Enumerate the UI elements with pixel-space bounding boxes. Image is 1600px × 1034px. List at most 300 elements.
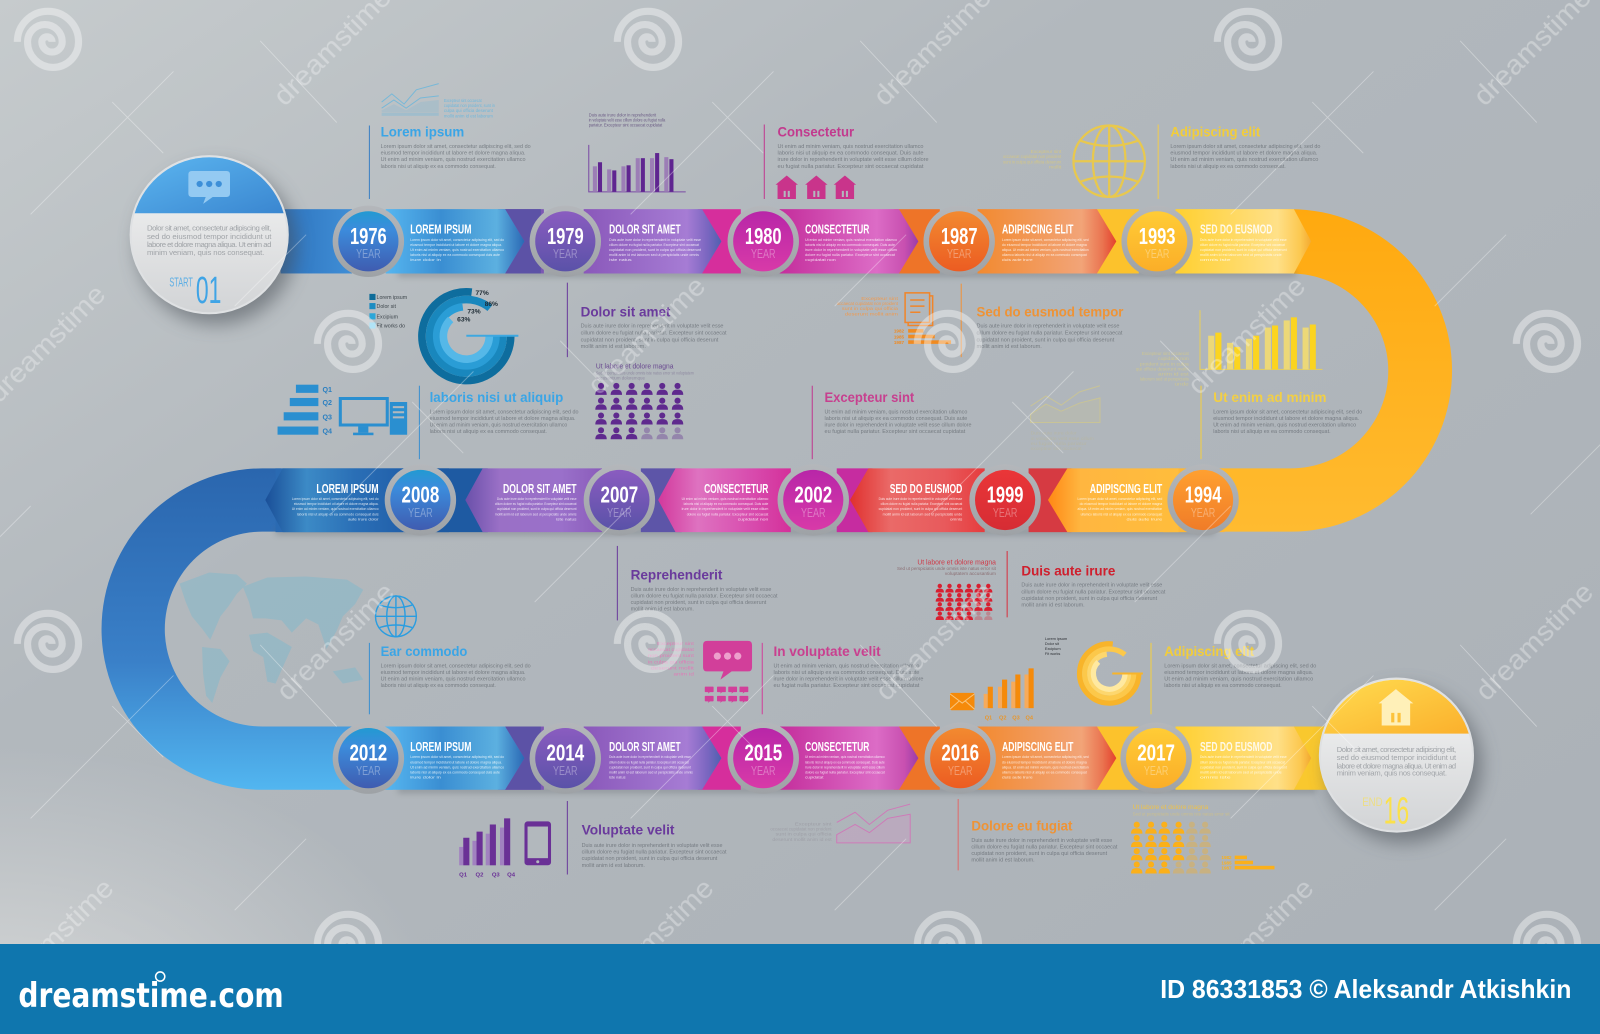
arrow: Dolor sit amet 2007: DOLOR SIT AMET xyxy=(503,481,577,496)
body text: cillum dolore eu fugiat nulla pariatur. Excepteur sint occaecat xyxy=(971,844,1118,850)
heading: Duis aute irure xyxy=(1021,564,1115,580)
watermark: dreamstime xyxy=(1469,576,1599,706)
small bubbles xyxy=(705,687,748,703)
caption note xyxy=(897,566,997,576)
body text: mollit anim id est laborum. xyxy=(977,344,1042,350)
body text: laboris nisi ut aliquip ex ea commodo consequat. xyxy=(1170,164,1286,170)
arrow: Dolor sit amet 2007: cillum dolore eu fugiat nulla pariatur. Excepteur sint occaecat xyxy=(495,501,577,506)
year badge 2012: 2012 xyxy=(349,740,387,766)
icons: houses xyxy=(776,176,856,199)
arrow: Lorem ipsum 1976: Lorem ipsum dolor sit amet, consectetur adipiscing elit, sed do xyxy=(410,237,505,242)
arrow: Sed do eusmod 1993: SED DO EUSMOD xyxy=(1200,222,1273,237)
year badge 2016: YEAR xyxy=(948,763,972,778)
start text: Dolor sit amet, consectetur adipiscing elit, xyxy=(147,224,271,233)
body text xyxy=(381,663,531,689)
bar labels: Q4 xyxy=(1026,715,1034,721)
year badge 1999: YEAR xyxy=(993,505,1017,520)
body text: laboris nisi ut aliquip ex ea commodo consequat. Duis aute xyxy=(773,670,919,676)
year badge 1993: 1993 xyxy=(1139,223,1176,249)
arrow: Sed do eusmod 2017 xyxy=(1176,727,1311,790)
arrow: Lorem ipsum 1976: laboris nisi ut aliquip ex ea commodo consequat duis aute xyxy=(410,252,501,257)
donut labels: 63% xyxy=(457,316,471,323)
legend: Fit works do xyxy=(377,324,405,330)
start number: 01 xyxy=(196,269,221,311)
heading: Ut enim ad minim xyxy=(1213,390,1327,406)
arrow: Consectetur 1980: cupidatat non xyxy=(805,257,836,262)
start text: labore et dolore magna aliqua. Ut enim ad xyxy=(147,240,271,249)
bar labels xyxy=(459,873,516,879)
arrow: Adipiscing elit 1994: ullamco laboris nisi ut aliquip ex ea commodo consequat xyxy=(1081,511,1163,516)
arrow: Dolor sit amet 2014: cillum dolore eu fugiat nulla pariatur. Excepteur sint occaecat xyxy=(609,759,689,764)
panel: Dolore eu fugiat xyxy=(958,799,1274,873)
arrow: Consectetur 2002 xyxy=(658,468,791,532)
body text xyxy=(631,587,778,613)
body text: cillum dolore eu fugiat nulla pariatur. Excepteur sint occaecat xyxy=(582,850,727,856)
arrow: Consectetur 2015: Ut enim ad minim veniam, quis nostrud exercitation ullamco xyxy=(805,754,885,759)
arrow: Lorem ipsum 2012 xyxy=(386,727,524,790)
body text: Duis aute irure dolor in reprehenderit in voluptate velit esse xyxy=(971,838,1112,844)
arrow: Consectetur 1980: CONSECTETUR xyxy=(805,222,870,237)
body text: mollit anim id est laborum. xyxy=(582,863,645,869)
year badge 2015 xyxy=(728,722,799,794)
Q1-Q4 stepped bars: Q3 xyxy=(322,413,332,421)
body text xyxy=(773,663,923,689)
arrow: Dolor sit amet 2007: iste natus xyxy=(556,516,577,521)
panel: Ut enim ad minim xyxy=(1136,310,1362,459)
year badge 2016 xyxy=(924,722,996,794)
chart note: in culpa qui officia xyxy=(648,659,694,664)
chart note: Excepteur sint xyxy=(861,296,899,301)
image credit: ID 86331853 © Aleksandr Atkishkin xyxy=(1160,976,1571,1004)
Q1-Q4 stepped bars: Q4 xyxy=(322,428,332,436)
arrow: Sed do eusmod 1993: cupidatat non proident, sunt in culpa qui officia deserunt xyxy=(1200,247,1288,252)
arrow: Adipiscing elit 2016: Lorem ipsum dolor sit amet, consectetur adipiscing elit, sed xyxy=(1002,754,1089,759)
body text: cillum dolore eu fugiat nulla pariatur. Excepteur sint occaecat xyxy=(631,593,778,599)
heading: Ear commodo xyxy=(381,644,468,660)
line chart xyxy=(382,84,439,114)
chart note: laborum sed ut perspiciatis xyxy=(1140,377,1189,382)
chart note: culpa qui officia deserunt xyxy=(444,108,494,113)
arrow: Dolor sit amet 1979: DOLOR SIT AMET xyxy=(609,222,681,237)
year badge 1979: YEAR xyxy=(553,246,578,261)
donut labels: 86% xyxy=(485,301,498,308)
body text: eiusmod tempor incididunt ut labore et dolore magna aliqua. xyxy=(1170,151,1318,157)
heading: Voluptate velit xyxy=(582,823,675,839)
mini bars: 1982 xyxy=(894,329,905,334)
arrow: Sed do eusmod 1999: omnis xyxy=(950,516,962,521)
arrow: Adipiscing elit 1994: ADIPISCING ELIT xyxy=(1090,481,1162,496)
year badge 1976: YEAR xyxy=(356,246,381,261)
body text: mollit anim id est laborum. xyxy=(1021,603,1085,609)
bar labels: Q2 xyxy=(999,715,1006,721)
panel: Adipiscing elit top xyxy=(1003,124,1320,199)
heading: laboris nisi ut aliquip xyxy=(430,390,564,406)
year badge 2007: YEAR xyxy=(607,505,632,520)
year badge 2008: 2008 xyxy=(402,482,439,508)
year badge 2015: 2015 xyxy=(744,740,782,766)
mini bars xyxy=(1221,855,1274,870)
Q1-Q4 stepped bars xyxy=(278,385,332,436)
world map xyxy=(180,572,363,703)
arrow: Dolor sit amet 1979: cupidatat non proident, sunt in culpa qui officia deserunt xyxy=(609,247,702,252)
chart note: sunt in culpa qui officia xyxy=(842,306,898,311)
people icons xyxy=(595,383,683,439)
body text: Duis aute irure dolor in reprehenderit in voluptate velit esse xyxy=(1021,583,1162,589)
arrow: Adipiscing elit 1987: do eiusmod tempor incididunt ut labore et dolore magna xyxy=(1002,242,1087,247)
arrow: Consectetur 2015: irure dolor in reprehenderit in voluptate velit esse cillum xyxy=(805,764,885,769)
faint line chart xyxy=(1031,386,1100,422)
brand logo text: dreamstime.com xyxy=(18,976,284,1015)
body text: Lorem ipsum dolor sit amet, consectetur adipiscing elit, sed do xyxy=(1170,144,1320,150)
caption: Ut labore et dolore magna xyxy=(917,558,996,566)
year badge 2017 xyxy=(1120,722,1192,794)
end text xyxy=(1337,745,1457,778)
band shadows xyxy=(276,270,1316,793)
mini bars xyxy=(894,329,951,345)
chart note xyxy=(770,822,832,842)
year badge 2007 xyxy=(584,464,655,536)
chart note: occaecat cupidatat non proident xyxy=(837,301,899,306)
panel: pink line chart xyxy=(770,804,910,843)
panel: Excepteur sint xyxy=(812,386,1100,459)
year badge 1987 xyxy=(923,206,995,277)
body text: Duis aute irure dolor in reprehenderit in voluptate velit esse xyxy=(977,324,1119,330)
year badge 2008 xyxy=(385,464,456,536)
year badge 2014 xyxy=(530,722,601,794)
body text: cupidatat non proident, sunt in culpa qui officia deserunt xyxy=(971,851,1108,857)
year badge 1976 xyxy=(333,206,404,277)
body text: eu fugiat nulla pariatur. Excepteur sint occaecat cupidatat xyxy=(773,683,920,689)
chart note: deserunt mollit anim xyxy=(845,311,898,316)
start text: sed do eiusmod tempor incididunt ut xyxy=(147,232,272,241)
bar labels xyxy=(985,715,1034,721)
year badge 2002 xyxy=(778,464,849,536)
arrow: Adipiscing elit 1987: ADIPISCING ELIT xyxy=(1002,222,1073,237)
mini bars: 1985 xyxy=(1221,860,1232,865)
arrow: Lorem ipsum 2008: laboris nisi ut aliquip ex ea commodo consequat duis xyxy=(297,511,379,516)
year badge 2002: 2002 xyxy=(794,482,832,508)
chart note: occaecat cupidatat xyxy=(648,647,695,652)
arrow: Adipiscing elit 1994 xyxy=(1048,468,1179,532)
arrow: Adipiscing elit 1994: Lorem ipsum dolor sit amet, consectetur adipiscing elit, sed xyxy=(1078,496,1162,501)
arrow: Lorem ipsum 1976: Ut enim ad minim veniam, quis nostrud exercitation ullamco xyxy=(410,247,505,252)
heading: Dolor sit amet xyxy=(581,304,671,320)
year badge 2007: 2007 xyxy=(601,482,638,508)
chart note: Excepteur sint xyxy=(657,641,695,646)
end text: minim veniam, quis nos consequat. xyxy=(1337,769,1447,778)
chart note: occaecat cupidatat non proident xyxy=(770,827,832,832)
body text: Lorem ipsum dolor sit amet, consectetur adipiscing elit, sed do xyxy=(381,663,531,669)
arrow: Consectetur 2015: CONSECTETUR xyxy=(805,739,870,754)
arrow: Consectetur 2015: dolore eu fugiat nulla pariatur. Excepteur sint occaecat xyxy=(805,769,885,774)
chart note: eu fugiat nulla pariatur xyxy=(1031,441,1087,446)
arrow: Sed do eusmod 1999: cupidatat non proident, sunt in culpa qui officia deserunt xyxy=(879,506,963,511)
body text: Ut enim ad minim veniam, quis nostrud exercitation ullamco xyxy=(430,423,567,429)
year badge 1979: 1979 xyxy=(547,223,584,249)
body text: eu fugiat nulla pariatur. Excepteur sint occaecat cupidatat xyxy=(824,429,966,435)
arrow: Adipiscing elit 1994: do eiusmod tempor incididunt ut labore et dolore magna xyxy=(1080,501,1163,506)
chart note xyxy=(648,641,695,677)
body text: cupidatat non proident, sunt in culpa qui officia deserunt xyxy=(582,856,718,862)
arrow: Adipiscing elit 1994: duis aute irure xyxy=(1127,516,1163,521)
year badge 1980 xyxy=(728,206,799,277)
arrow: Consectetur 2015 xyxy=(780,727,918,790)
legend: Lorem ipsum xyxy=(377,295,408,301)
chart note: Duis aute irure dolor xyxy=(1031,431,1077,436)
caption note: Sed ut perspiciatis unde omnis iste natus error sit xyxy=(897,566,997,571)
arrow: Consectetur 2002: laboris nisi ut aliquip ex ea commodo consequat. Duis aute xyxy=(684,501,769,506)
watermark: dreamstime xyxy=(270,576,400,706)
year badge 1980: 1980 xyxy=(745,223,782,249)
year badge 2002: YEAR xyxy=(801,505,826,520)
arrow: Lorem ipsum 1976: LOREM IPSUM xyxy=(410,222,471,237)
body text: eiusmod tempor incididunt ut labore et dolore magna aliqua. xyxy=(430,416,576,422)
arrow: Lorem ipsum 2012: Lorem ipsum dolor sit amet, consectetur adipiscing elit, sed do xyxy=(410,754,505,759)
chart note: qui officia deserunt mollit xyxy=(1136,366,1189,371)
chart note: proident sunt in culpa xyxy=(1140,361,1189,366)
arrow: Dolor sit amet 2007: mollit anim id est laborum sed ut perspiciatis unde omnis xyxy=(495,511,577,516)
chart note: excepteur sint occaecat xyxy=(1031,446,1082,451)
bar labels: Q3 xyxy=(492,873,500,879)
caption note: Sed ut perspiciatis unde omnis iste natus error sit xyxy=(1133,811,1230,816)
arrow: Dolor sit amet 2014: iste natus xyxy=(609,775,626,780)
body text: irure dolor in reprehenderit in voluptate velit esse cillum dolore xyxy=(778,157,929,163)
body text: Duis aute irure dolor in reprehenderit in voluptate velit esse xyxy=(582,843,722,849)
chart note xyxy=(837,296,899,316)
end text: labore et dolore magna aliqua. Ut enim ad xyxy=(1337,761,1456,770)
body text xyxy=(581,324,727,350)
body text: Ut enim ad minim veniam, quis nostrud exercitation ullamco xyxy=(381,677,526,683)
arrow: Lorem ipsum 2008: Lorem ipsum dolor sit amet, consectetur adipiscing elit, sed do xyxy=(292,496,379,501)
chart note: mollit anim id est laborum xyxy=(444,113,493,118)
icon: phone xyxy=(524,821,551,865)
chart note xyxy=(1003,149,1062,169)
body text: laboris nisi ut aliquip ex ea commodo consequat. Duis aute xyxy=(778,151,923,157)
heading: Lorem ipsum xyxy=(381,125,464,141)
body text xyxy=(1213,409,1362,435)
arrow: Sed do eusmod 2017: omnis iste xyxy=(1200,775,1232,780)
row 3: timeline band xyxy=(333,722,1332,794)
body text: Ut enim ad minim veniam, quis nostrud exercitation ullamco xyxy=(381,157,526,163)
heading: Consectetur xyxy=(778,125,854,141)
body text: mollit anim id est laborum. xyxy=(581,344,646,350)
heading: In voluptate velit xyxy=(773,644,881,660)
mini bars: 1987 xyxy=(894,340,905,345)
arrow: Consectetur 2015: cupidatat xyxy=(805,775,824,780)
arrow: Adipiscing elit 2016: ullamco laboris nisi ut aliquip ex ea commodo consequat xyxy=(1002,769,1087,774)
chart note: unde xyxy=(1174,382,1189,387)
start text xyxy=(147,224,272,257)
panel: purple bar chart xyxy=(589,112,686,192)
arrow: Dolor sit amet 1979: mollit anim id est laborum sed ut perspiciatis unde omnis xyxy=(609,252,699,257)
chart note: anim id xyxy=(673,672,694,677)
people icons xyxy=(1131,822,1211,873)
panel: Voluptate velit xyxy=(459,801,727,879)
chart note: in voluptate velit esse cillum xyxy=(1031,436,1094,441)
arrow: Consectetur 2002: Ut enim ad minim veniam, quis nostrud exercitation ullamco xyxy=(682,496,769,501)
arrow: Consectetur 2002: cupidatat non xyxy=(738,516,768,521)
icon: house xyxy=(1379,689,1413,726)
body text: Lorem ipsum dolor sit amet, consectetur adipiscing elit, sed do xyxy=(1213,409,1362,415)
body text: eu fugiat nulla pariatur. Excepteur sint occaecat cupidatat xyxy=(778,164,924,170)
panel: Adipiscing elit lower xyxy=(1045,636,1316,714)
arrow: Consectetur 1980: dolore eu fugiat nulla pariatur. Excepteur sint occaecat xyxy=(805,252,896,257)
body text xyxy=(971,838,1118,864)
heading: Reprehenderit xyxy=(631,568,723,584)
donut labels: 73% xyxy=(467,308,481,315)
arrow: Dolor sit amet 2014: Duis aute irure dolor in reprehenderit in voluptate velit esse xyxy=(609,754,691,759)
body text: laboris nisi ut aliquip ex ea commodo consequat. xyxy=(381,683,496,689)
chart note: Excepteur sint occaecat xyxy=(1142,351,1189,356)
line chart xyxy=(837,804,910,843)
body text xyxy=(381,144,531,170)
arrow: Dolor sit amet 2014: mollit anim id est laborum sed ut perspiciatis unde omnis xyxy=(609,769,693,774)
year badge 1994: YEAR xyxy=(1191,505,1215,520)
caption note: voluptatem accusantium xyxy=(945,571,996,576)
arrow: Consectetur 2002: dolore eu fugiat nulla pariatur. Excepteur sint occaecat xyxy=(687,511,769,516)
chart note: deserunt mollit anim id est xyxy=(772,837,832,842)
chart note: mollit xyxy=(1049,164,1062,169)
watermark: dreamstime xyxy=(589,872,720,1002)
arrow: Sed do eusmod 1993: Duis aute irure dolor in reprehenderit in voluptate velit esse xyxy=(1200,237,1287,242)
chart note: anim id est xyxy=(1158,372,1190,377)
body text: eiusmod tempor incididunt ut labore et dolore magna aliqua. xyxy=(381,151,526,157)
body text: Lorem ipsum dolor sit amet, consectetur adipiscing elit, sed do xyxy=(1164,663,1316,669)
arrow: Dolor sit amet 2014: DOLOR SIT AMET xyxy=(609,739,681,754)
body text xyxy=(582,843,727,869)
body text xyxy=(1164,663,1316,689)
caption: Ut labore et dolore magna xyxy=(596,362,673,370)
arrow: Sed do eusmod 1999: mollit anim id est laborum sed ut perspiciatis unde xyxy=(883,511,963,516)
arrow: Sed do eusmod 1993: mollit anim id est laborum sed ut perspiciatis unde xyxy=(1200,252,1282,257)
body text: laboris nisi ut aliquip ex ea commodo consequat. xyxy=(1164,683,1282,689)
year badge 2012: YEAR xyxy=(356,763,381,778)
legend xyxy=(1045,636,1067,656)
arrow: Dolor sit amet 1979: Duis aute irure dolor in reprehenderit in voluptate velit esse xyxy=(609,237,702,242)
body text: Lorem ipsum dolor sit amet, consectetur adipiscing elit, sed do xyxy=(430,409,579,415)
year badge 1979 xyxy=(530,206,601,277)
heading: Sed do eusmod tempor xyxy=(977,304,1124,320)
arrow: Consectetur 1980: irure dolor in reprehenderit in voluptate velit esse cillum xyxy=(805,247,898,252)
arrow: Lorem ipsum 2008: eiusmod tempor incididunt ut labore et dolore magna aliqua. xyxy=(294,501,379,506)
arrow: Sed do eusmod 2017: cillum dolore eu fugiat nulla pariatur. Excepteur sint occaecat xyxy=(1200,759,1285,764)
body text: Ut enim ad minim veniam, quis nostrud exercitation ullamco xyxy=(773,663,919,669)
arrow: Lorem ipsum 1976: irure dolor in xyxy=(410,257,441,262)
year badge 2008: YEAR xyxy=(408,505,433,520)
body text: irure dolor in reprehenderit in voluptate velit esse cillum dolore xyxy=(824,423,971,429)
body text: mollit anim id est laborum. xyxy=(971,858,1035,864)
body text xyxy=(778,144,929,170)
chart note: non proident sunt xyxy=(648,653,695,658)
chart note: pariatur. Excepteur sint occaecat cupidatat xyxy=(589,123,663,128)
arrow: Adipiscing elit 1994: aliqua. Ut enim ad minim veniam, quis nostrud exercitation xyxy=(1078,506,1162,511)
bar labels: Q3 xyxy=(1012,715,1020,721)
chart note: occaecat cupidatat non proident xyxy=(1003,154,1062,159)
panel: purple people pictogram xyxy=(595,362,694,439)
body text: laboris nisi ut aliquip ex ea commodo consequat. xyxy=(430,429,547,435)
body text: eiusmod tempor incididunt ut labore et dolore magna aliqua. xyxy=(1213,416,1360,422)
body text: Ut enim ad minim veniam, quis nostrud exercitation ullamco xyxy=(1164,677,1313,683)
donut xyxy=(422,292,518,381)
arrow: Consectetur 1980 xyxy=(780,209,918,273)
arrow: Dolor sit amet 2007: Duis aute irure dolor in reprehenderit in voluptate velit esse xyxy=(497,496,577,501)
arrow: Lorem ipsum 2012: LOREM IPSUM xyxy=(410,739,471,754)
yellow donut xyxy=(1080,644,1143,703)
icon: computer xyxy=(339,397,407,435)
legend: Dolor sit xyxy=(1045,641,1060,646)
legend xyxy=(369,294,408,330)
arrow: Dolor sit amet 2007: cupidatat non proident, sunt in culpa qui officia deserunt xyxy=(497,506,577,511)
chart note xyxy=(444,98,495,118)
heading: Adipiscing elit xyxy=(1164,644,1254,660)
chart note: sunt in culpa qui officia deserunt xyxy=(1003,159,1062,164)
yellow bar chart xyxy=(1200,310,1322,369)
watermark: dreamstime xyxy=(1181,270,1311,400)
chart note: Excepteur sint xyxy=(795,822,832,827)
arrow: Sed do eusmod 1993 xyxy=(1176,209,1311,273)
arrow: Sed do eusmod 1999: SED DO EUSMOD xyxy=(890,481,963,496)
panel: Dolor sit amet xyxy=(567,283,727,357)
heading: Dolore eu fugiat xyxy=(971,819,1073,835)
panel: orange bars xyxy=(950,668,1034,721)
watermark: dreamstime xyxy=(869,576,999,706)
year badge 1993 xyxy=(1121,206,1193,277)
caption note: accusantium doloremque xyxy=(596,376,645,381)
arrow: Sed do eusmod 1993: cillum dolore eu fugiat nulla pariatur. Excepteur sint occaecat xyxy=(1200,242,1285,247)
arrow: Adipiscing elit 2016 xyxy=(978,727,1116,790)
body text xyxy=(1170,144,1320,170)
body text: mollit anim id est laborum. xyxy=(631,607,694,613)
arrow: Sed do eusmod 2017: SED DO EUSMOD xyxy=(1200,739,1273,754)
body text: Ut enim ad minim veniam, quis nostrud exercitation ullamco xyxy=(1213,423,1356,429)
year badge 1999: 1999 xyxy=(987,482,1023,508)
end number: 16 xyxy=(1384,789,1409,831)
donut labels xyxy=(457,290,498,323)
arrow: Adipiscing elit 2016: ADIPISCING ELIT xyxy=(1002,739,1073,754)
row 1: timeline band xyxy=(281,206,1311,277)
start number xyxy=(169,269,221,311)
arrow: Lorem ipsum 1976 xyxy=(386,209,524,273)
donut labels: 77% xyxy=(476,290,489,297)
body text: cillum dolore eu fugiat nulla pariatur. Excepteur sint occaecat xyxy=(581,331,727,337)
body text: cupidatat non proident, sunt in culpa qui officia deserunt xyxy=(581,337,719,343)
body text: laboris nisi ut aliquip ex ea commodo consequat. xyxy=(1213,429,1331,435)
year badge 1980: YEAR xyxy=(751,246,776,261)
icon: globe xyxy=(1073,126,1145,197)
year badge 2012 xyxy=(333,722,404,794)
panel: Consectetur xyxy=(764,124,929,199)
bar labels: Q2 xyxy=(476,873,484,879)
arrow: Dolor sit amet 2014 xyxy=(584,727,721,790)
bar chart xyxy=(589,145,686,192)
arrow: Lorem ipsum 2012: eiusmod tempor incididunt ut labore et dolore magna aliqua. xyxy=(410,759,502,764)
arrow: Dolor sit amet 2007 xyxy=(465,468,602,532)
arrow: Adipiscing elit 1987: Lorem ipsum dolor sit amet, consectetur adipiscing elit, sed xyxy=(1002,237,1089,242)
row 2: timeline band xyxy=(265,464,1239,536)
body text: Duis aute irure dolor in reprehenderit in voluptate velit esse xyxy=(581,324,723,330)
year badge 1999 xyxy=(969,464,1041,536)
year badge 1994 xyxy=(1167,464,1239,536)
arrow: Adipiscing elit 1987: aliqua. Ut enim ad minim veniam, quis nostrud exercitation xyxy=(1002,247,1089,252)
arrow: Consectetur 2002: CONSECTETUR xyxy=(704,481,769,496)
body text: Lorem ipsum dolor sit amet, consectetur adipiscing elit, sed do xyxy=(381,144,531,150)
caption: Ut labore et dolore magna xyxy=(1133,804,1208,811)
logo spiral xyxy=(156,972,165,981)
body text: irure dolor in reprehenderit in voluptate velit esse cillum dolore xyxy=(773,677,923,683)
arrow: Sed do eusmod 1993: omnis iste xyxy=(1200,257,1232,262)
icon: speech bubble xyxy=(703,641,752,680)
caption note: Sed ut perspiciatis unde omnis iste natus error sit voluptatem xyxy=(596,370,694,375)
